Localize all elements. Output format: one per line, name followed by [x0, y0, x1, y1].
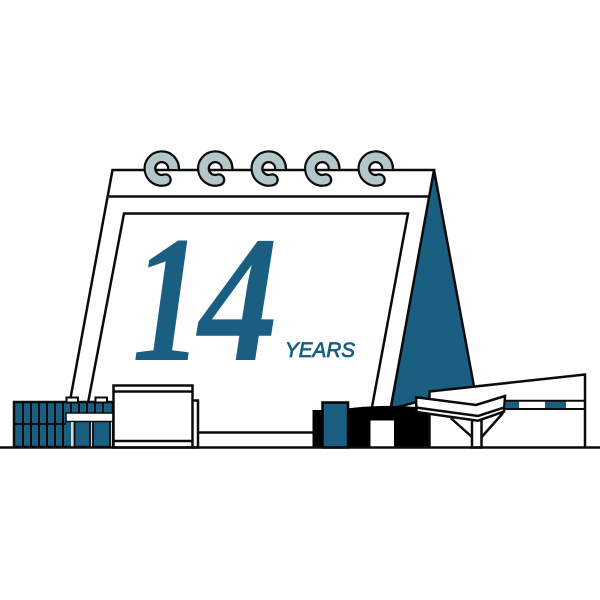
calendar rings	[150, 157, 388, 180]
label: YEARS: YEARS	[285, 338, 356, 362]
ring 2	[203, 157, 227, 180]
ground line	[0, 446, 600, 449]
heading number: 14: 4	[196, 200, 278, 400]
ring 5	[364, 157, 388, 180]
walkway between buildings	[198, 431, 313, 434]
building: black arena with blue tower	[312, 402, 431, 448]
calendar back stand: blue triangle	[387, 170, 474, 410]
heading number: 14: 1	[132, 200, 203, 400]
heading number: 14	[132, 200, 278, 400]
canopy with supports	[416, 396, 505, 448]
building: left blue striped block	[14, 398, 113, 447]
ring 4	[310, 157, 334, 180]
building: white box	[114, 386, 198, 448]
ring 1	[150, 157, 174, 180]
ring 3	[257, 157, 281, 180]
building: right wedge roof	[429, 374, 585, 448]
calendar page	[70, 170, 434, 432]
